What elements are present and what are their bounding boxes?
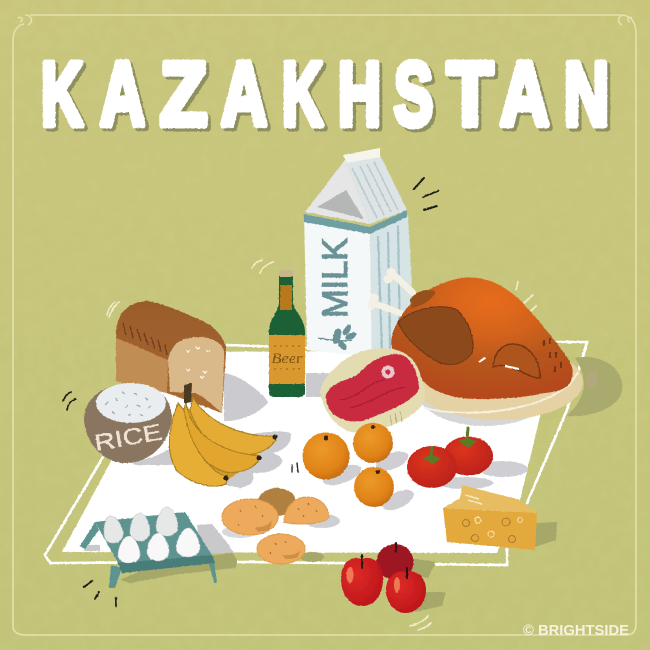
egg tray bbox=[80, 507, 217, 588]
title letters: Z bbox=[160, 45, 207, 145]
steak bbox=[320, 348, 425, 433]
motion marks: milk bbox=[414, 178, 438, 210]
title shadow: A bbox=[503, 48, 552, 148]
roast turkey bbox=[368, 268, 598, 420]
title letters: K bbox=[282, 45, 323, 145]
turkey leg bbox=[410, 290, 436, 308]
title shadow: A bbox=[224, 48, 270, 148]
motion marks: bread bbox=[107, 302, 119, 317]
title shadow: S bbox=[397, 48, 436, 148]
title shadow: K bbox=[285, 48, 326, 148]
motion marks: rice bbox=[63, 392, 76, 410]
title letters: A bbox=[221, 45, 267, 145]
title shadow: N bbox=[567, 48, 612, 148]
plate bbox=[413, 344, 583, 420]
rice bowl bbox=[84, 383, 172, 463]
milk carton bbox=[304, 148, 412, 357]
carton crest bbox=[343, 148, 380, 163]
title letters: A bbox=[100, 45, 145, 145]
title letters: H bbox=[338, 45, 381, 145]
bananas bbox=[169, 383, 278, 486]
apples bbox=[341, 543, 426, 613]
carton roof left bbox=[305, 160, 370, 224]
food items bbox=[63, 148, 598, 630]
title letters bbox=[41, 45, 609, 145]
motion marks: apples bbox=[410, 616, 431, 630]
tray top bbox=[95, 512, 215, 573]
title shadow: T bbox=[450, 48, 496, 148]
carton roof right bbox=[345, 155, 407, 224]
beer bottle bbox=[269, 270, 305, 397]
tomatoes bbox=[407, 428, 493, 488]
bread slice bbox=[168, 337, 224, 413]
turkey body bbox=[391, 278, 573, 399]
motion marks: eggs bbox=[84, 581, 116, 606]
carton front bbox=[304, 215, 372, 357]
turkey bones bbox=[373, 273, 413, 313]
title bbox=[41, 45, 612, 148]
title letters: N bbox=[564, 45, 609, 145]
bread side bbox=[116, 338, 168, 393]
title letters: K bbox=[41, 45, 83, 145]
milk label: MILK bbox=[316, 238, 355, 318]
motion marks: bottle bbox=[252, 260, 273, 273]
title letters: S bbox=[394, 45, 433, 145]
tray legs bbox=[80, 522, 217, 588]
carton side bbox=[370, 215, 412, 357]
title shadow: K bbox=[44, 48, 86, 148]
icon: leaf sprig bbox=[318, 323, 358, 352]
bread loaf bbox=[116, 301, 226, 413]
beer bottle: Beer bbox=[272, 351, 303, 367]
title shadow: H bbox=[341, 48, 384, 148]
title letters: A bbox=[500, 45, 549, 145]
oranges bbox=[302, 423, 394, 507]
copyright credit: © BRIGHTSIDE bbox=[523, 623, 629, 639]
beer label bbox=[269, 335, 305, 384]
bread rolls bbox=[222, 488, 329, 564]
motion marks: orange bbox=[292, 463, 298, 472]
tablecloth bbox=[45, 342, 587, 565]
carton teal band bbox=[304, 210, 407, 234]
rice label: RICE bbox=[92, 419, 164, 456]
title shadow bbox=[44, 48, 612, 148]
food shadows bbox=[84, 350, 622, 612]
motion marks: turkey bbox=[516, 282, 536, 311]
eggs bbox=[104, 507, 200, 563]
cheese wedge bbox=[443, 485, 537, 550]
title shadow: A bbox=[103, 48, 148, 148]
turkey thigh bbox=[493, 344, 540, 378]
turkey wing bbox=[398, 307, 473, 365]
title letters: T bbox=[447, 45, 493, 145]
title shadow: Z bbox=[163, 48, 210, 148]
